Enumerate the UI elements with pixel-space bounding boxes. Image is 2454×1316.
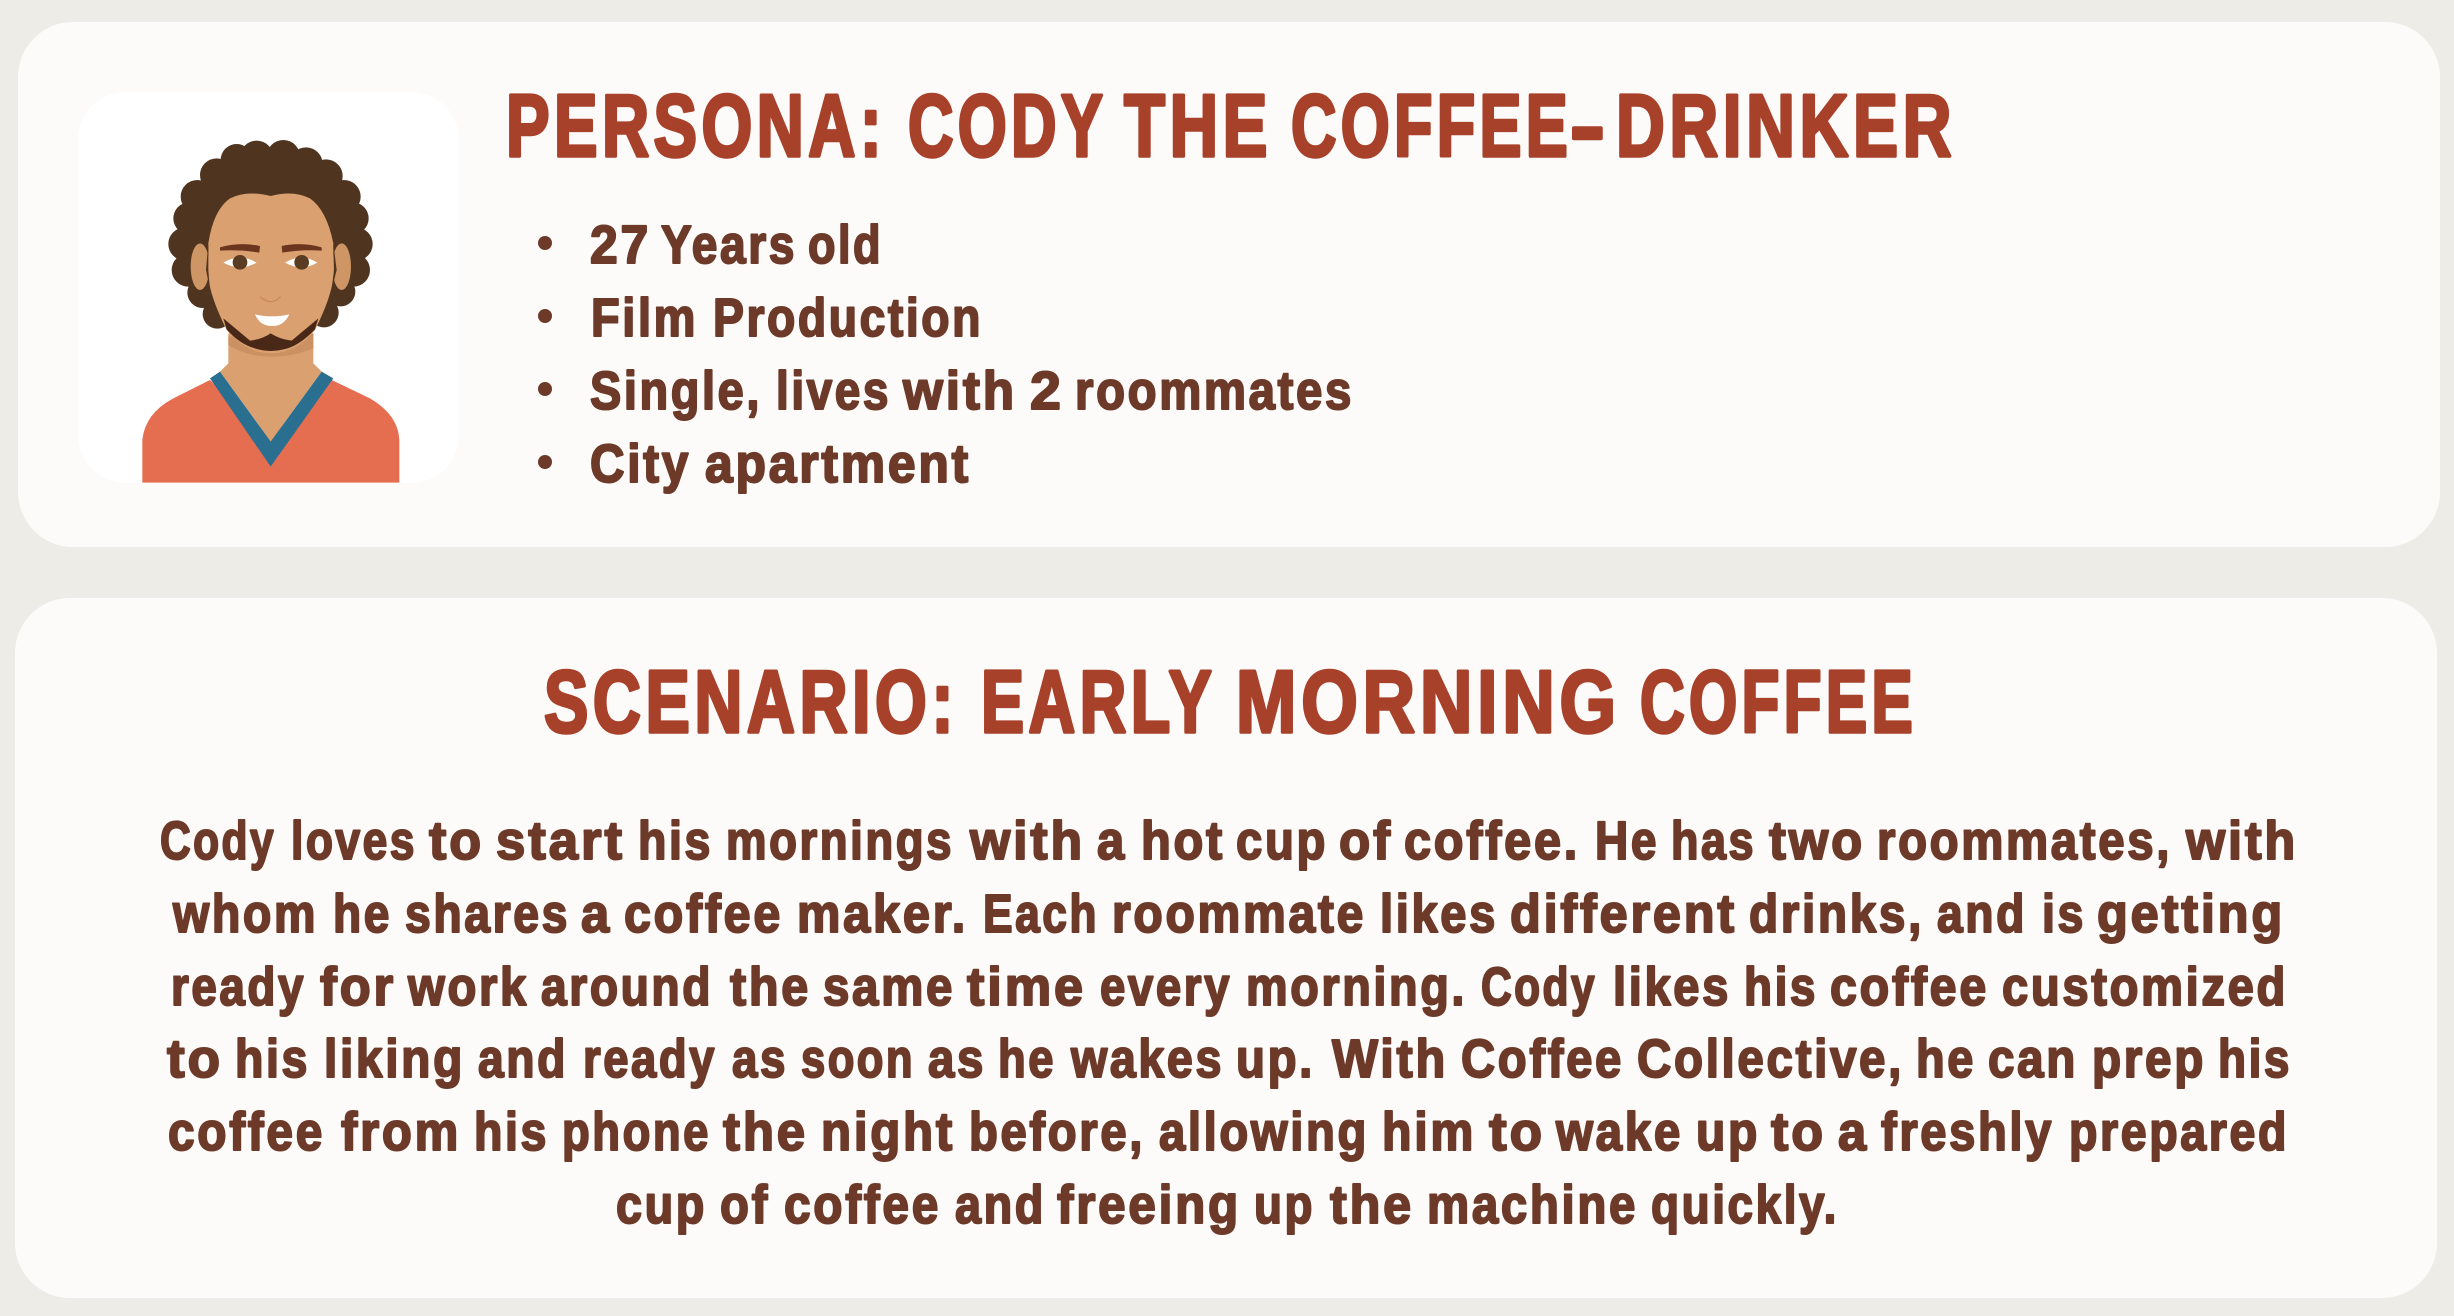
text block: scenario description: two [1769, 811, 1865, 871]
text block: scenario description: prep [2092, 1029, 2206, 1089]
text block: scenario description: With [1332, 1029, 1448, 1089]
text block: scenario description: his [1744, 957, 1818, 1017]
text block: scenario description: with [2185, 811, 2298, 871]
text block: scenario description: every [1100, 957, 1232, 1017]
text block: scenario description: wakes [1070, 1029, 1224, 1089]
text block: scenario description: from [341, 1102, 461, 1162]
text block: scenario description: up. [1236, 1029, 1315, 1089]
text block: scenario description: whom [172, 884, 318, 944]
heading: scenario: SCENARIO: [544, 652, 958, 751]
text block: scenario description: of [720, 1175, 770, 1235]
text block: scenario description: shares [405, 884, 570, 944]
text block: scenario description: to [1771, 1102, 1826, 1162]
text block: scenario description: Each [983, 884, 1099, 944]
panel: persona [18, 22, 2440, 547]
text block: scenario description: drinks, [1749, 884, 1924, 944]
list: persona facts: Years [661, 215, 797, 275]
text block: scenario description: He [1595, 811, 1659, 871]
text block: scenario description: a [581, 884, 612, 944]
text block: scenario description: up [1696, 1102, 1760, 1162]
text block: scenario description: liking [324, 1029, 465, 1089]
text block: scenario description: with [969, 811, 1085, 871]
text block: scenario description: the [723, 1102, 808, 1162]
text block: scenario description: wake [1555, 1102, 1683, 1162]
text block: scenario description: to [1489, 1102, 1545, 1162]
text block: scenario description: his [235, 1029, 310, 1089]
text block: scenario description: around [541, 957, 713, 1017]
text block: scenario description: allowing [1159, 1102, 1369, 1162]
text block: scenario description: time [967, 957, 1086, 1017]
list: persona facts: apartment [705, 434, 971, 494]
text block: scenario description: ready [171, 957, 306, 1017]
text block: scenario description: the [1330, 1175, 1414, 1235]
text block: scenario description: and [478, 1029, 568, 1089]
heading: persona: - [1570, 76, 1612, 175]
text block: scenario description: mornings [726, 811, 954, 871]
list: persona facts: City [590, 434, 691, 494]
text block: scenario description: coffee. [1404, 811, 1580, 871]
heading: persona: COFFEE [1291, 76, 1572, 175]
text block: scenario description: coffee [624, 884, 783, 944]
list: persona facts: 27 [590, 215, 651, 275]
text block: scenario description: ready [583, 1029, 717, 1089]
list: persona facts: with [902, 361, 1017, 421]
text block: scenario description [160, 811, 2298, 1235]
text block: scenario description: work [407, 957, 529, 1017]
text block: scenario description: he [1916, 1029, 1976, 1089]
text block: scenario description: the [730, 957, 811, 1017]
text block: scenario description: and [955, 1175, 1046, 1235]
text block: scenario description: phone [562, 1102, 711, 1162]
text block: scenario description: machine [1427, 1175, 1638, 1235]
text block: scenario description: cup [1236, 811, 1328, 871]
text block: scenario description: can [1988, 1029, 2078, 1089]
list: persona facts: lives [776, 361, 891, 421]
text block: scenario description: has [1671, 811, 1756, 871]
text block: scenario description: coffee [784, 1175, 941, 1235]
panel: scenario [15, 598, 2437, 1298]
text block: scenario description: for [320, 957, 396, 1017]
text block: scenario description: up [1254, 1175, 1315, 1235]
heading: persona: THE [1124, 76, 1272, 175]
text block: scenario description: a [1097, 811, 1127, 871]
text block: scenario description: and [1937, 884, 2027, 944]
text block: scenario description: as [928, 1029, 986, 1089]
text block: scenario description: customized [2002, 957, 2288, 1017]
text block: scenario description: prepared [2069, 1102, 2289, 1162]
list: persona facts: Single, [590, 361, 762, 421]
text block: scenario description: maker. [797, 884, 968, 944]
text block: scenario description: to [429, 811, 484, 871]
heading: scenario: MORNING [1236, 652, 1621, 751]
text block: scenario description: freeing [1057, 1175, 1241, 1235]
text block: scenario description: soon [801, 1029, 915, 1089]
text block: scenario description: night [821, 1102, 955, 1162]
list: persona facts [538, 215, 1354, 494]
text block: scenario description: his [638, 811, 713, 871]
text block: scenario description: his [474, 1102, 549, 1162]
heading: scenario: EARLY [981, 652, 1215, 751]
text block: scenario description: to [167, 1029, 223, 1089]
heading: persona: PERSONA: [506, 76, 886, 175]
text block: scenario description: loves [291, 811, 417, 871]
text block: scenario description: same [823, 957, 955, 1017]
text block: scenario description: his [2218, 1029, 2292, 1089]
text block: scenario description: different [1510, 884, 1737, 944]
icon: avatar of Cody [78, 92, 459, 483]
text block: scenario description: roommate [1112, 884, 1366, 944]
text block: scenario description: as [732, 1029, 788, 1089]
text block: scenario description: likes [1380, 884, 1498, 944]
text block: scenario description: of [1339, 811, 1393, 871]
text block: scenario description: hot [1141, 811, 1225, 871]
text block: scenario description: Cody [1481, 957, 1597, 1017]
text block: scenario description: is [2042, 884, 2086, 944]
list: persona facts: Film [591, 288, 698, 348]
text block: scenario description: Cody [160, 811, 276, 871]
text block: scenario description: getting [2097, 884, 2285, 944]
text block: scenario description: morning. [1246, 957, 1467, 1017]
text block: scenario description: freshly [1881, 1102, 2054, 1162]
text block: scenario description: before, [969, 1102, 1145, 1162]
list: persona facts: old [808, 215, 883, 275]
list: persona facts: 2 [1030, 361, 1064, 421]
text block: scenario description: likes [1613, 957, 1731, 1017]
heading: scenario: COFFEE [1640, 652, 1917, 751]
list: persona facts: roommates [1075, 361, 1354, 421]
text block: scenario description: quickly. [1651, 1175, 1839, 1235]
text block: scenario description: coffee [1830, 957, 1989, 1017]
text block: scenario description: roommates, [1877, 811, 2172, 871]
text block: scenario description: him [1382, 1102, 1476, 1162]
heading: persona: DRINKER [1616, 76, 1956, 175]
text block: scenario description: he [998, 1029, 1056, 1089]
text block: scenario description: cup [616, 1175, 707, 1235]
text block: scenario description: a [1838, 1102, 1869, 1162]
text block: scenario description: coffee [168, 1102, 325, 1162]
text block: scenario description: start [496, 811, 625, 871]
heading: persona: CODY [908, 76, 1106, 175]
text block: scenario description: Coffee [1461, 1029, 1624, 1089]
text block: scenario description: Collective, [1637, 1029, 1904, 1089]
text block: scenario description: he [333, 884, 392, 944]
list: persona facts: Production [713, 288, 983, 348]
